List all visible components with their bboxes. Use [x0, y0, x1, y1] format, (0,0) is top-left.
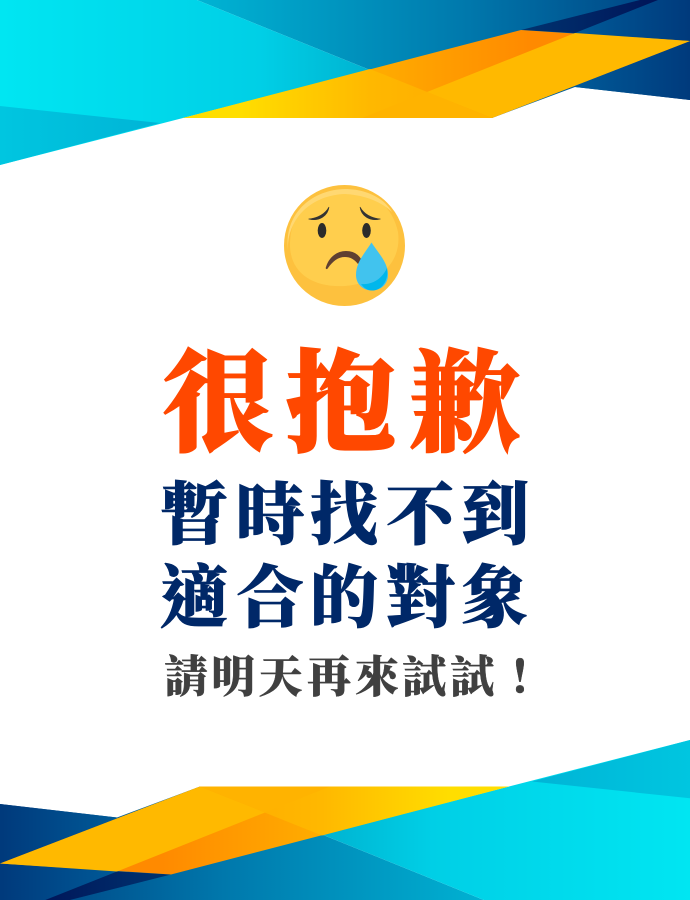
text: no suitable match line two: 適合的對象	[160, 560, 529, 636]
text: please try again tomorrow: 請明天再來試試！	[164, 653, 542, 702]
top banner	[0, 0, 690, 165]
heading: sorry: 很抱歉	[162, 344, 520, 466]
bottom banner	[0, 740, 690, 900]
icon: crying face emoji	[284, 185, 405, 306]
text: no suitable match line one: 暫時找不到	[160, 478, 529, 554]
